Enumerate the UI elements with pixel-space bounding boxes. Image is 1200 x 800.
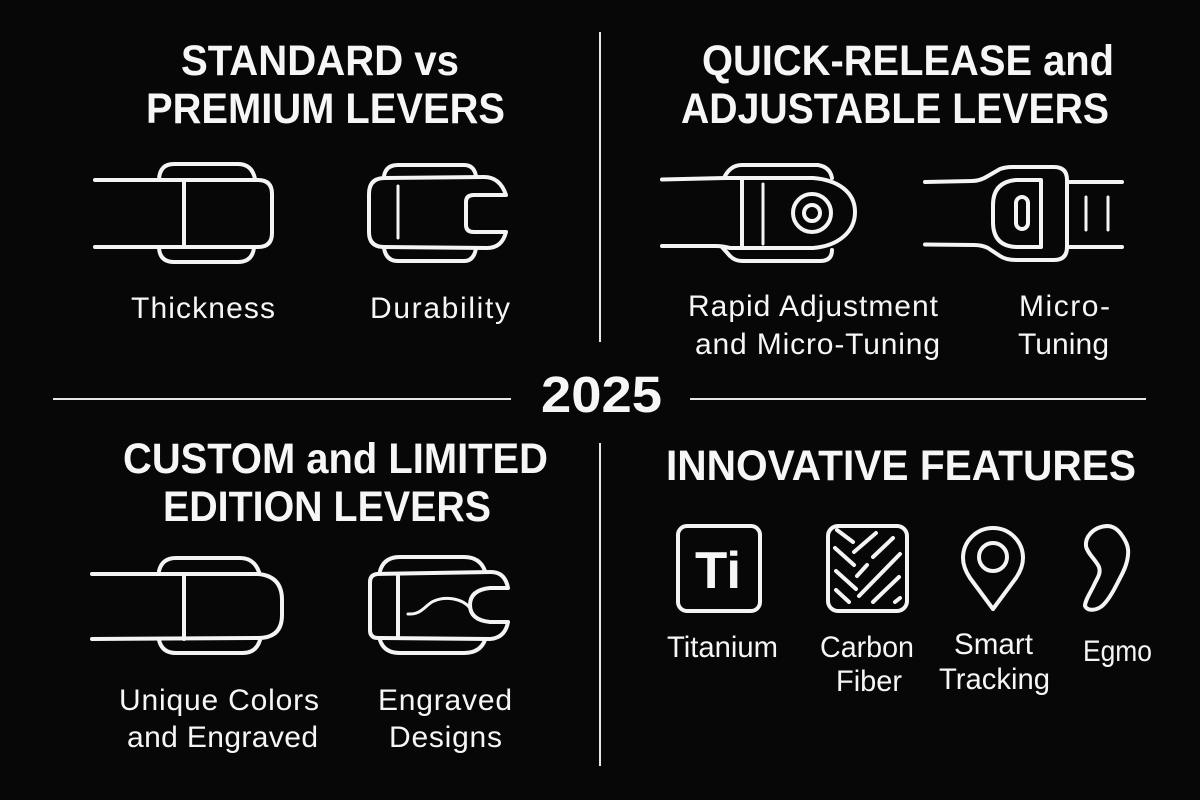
label: engraved designs: Designs [389,721,502,754]
heading: innovative features: INNOVATIVE FEATURES [666,442,1136,490]
heading: quick-release and adjustable levers [681,37,1114,133]
label: engraved designs [378,684,512,754]
icon: micro-tuning lever [925,167,1122,260]
label: unique colors and engraved [119,684,319,754]
icon: durability lever [369,165,506,261]
year label: 2025: 2025 [541,366,662,423]
label: smart tracking: Tracking [939,663,1050,696]
icon: thickness lever [95,164,272,262]
heading: quick-release and adjustable levers: QUICK-RELEASE and [702,37,1114,85]
icon: carbon fiber [828,526,907,611]
label: unique colors and engraved: and Engraved [127,721,318,754]
heading: quick-release and adjustable levers: ADJUSTABLE LEVERS [681,85,1109,133]
label: durability: Durability [370,292,510,325]
icon: custom lever [92,558,282,653]
label: carbon fiber: Fiber [836,665,902,698]
label: titanium: Titanium [667,631,778,664]
panel: innovative features [666,442,1152,698]
label: thickness: Thickness [131,292,275,325]
heading: standard vs premium levers [146,37,505,133]
label: carbon fiber: Carbon [820,631,914,664]
heading: custom and limited edition levers: EDITION LEVERS [163,483,491,531]
panel: standard vs premium levers [95,37,510,325]
label: egmo: Egmo [1083,635,1152,668]
label: unique colors and engraved: Unique Colors [119,684,319,717]
panel: custom and limited edition levers [92,435,548,754]
label: smart tracking: Smart [954,628,1034,661]
heading: custom and limited edition levers: CUSTOM and LIMITED [123,435,548,483]
panel: quick-release and adjustable levers [662,37,1122,361]
label: micro-tuning: Micro- [1019,290,1110,323]
icon: location pin [963,528,1023,609]
heading: standard vs premium levers: STANDARD vs [181,37,459,85]
label: micro-tuning [1018,290,1110,361]
label: carbon fiber [820,631,914,698]
icon: titanium: Ti [695,542,741,600]
heading: standard vs premium levers: PREMIUM LEVERS [146,85,505,133]
label: micro-tuning: Tuning [1018,328,1109,361]
icon: quick-release lever [662,165,855,261]
icon: ergonomic grip [1085,526,1128,610]
icon: titanium [678,526,760,611]
heading: custom and limited edition levers [123,435,548,531]
label: engraved designs: Engraved [378,684,512,717]
label: rapid adjustment and micro-tuning [688,290,940,361]
label: smart tracking [939,628,1050,696]
icon: engraved lever [370,557,508,653]
label: rapid adjustment and micro-tuning: and Micro-Tuning [695,328,940,361]
label: rapid adjustment and micro-tuning: Rapid Adjustment [688,290,939,323]
